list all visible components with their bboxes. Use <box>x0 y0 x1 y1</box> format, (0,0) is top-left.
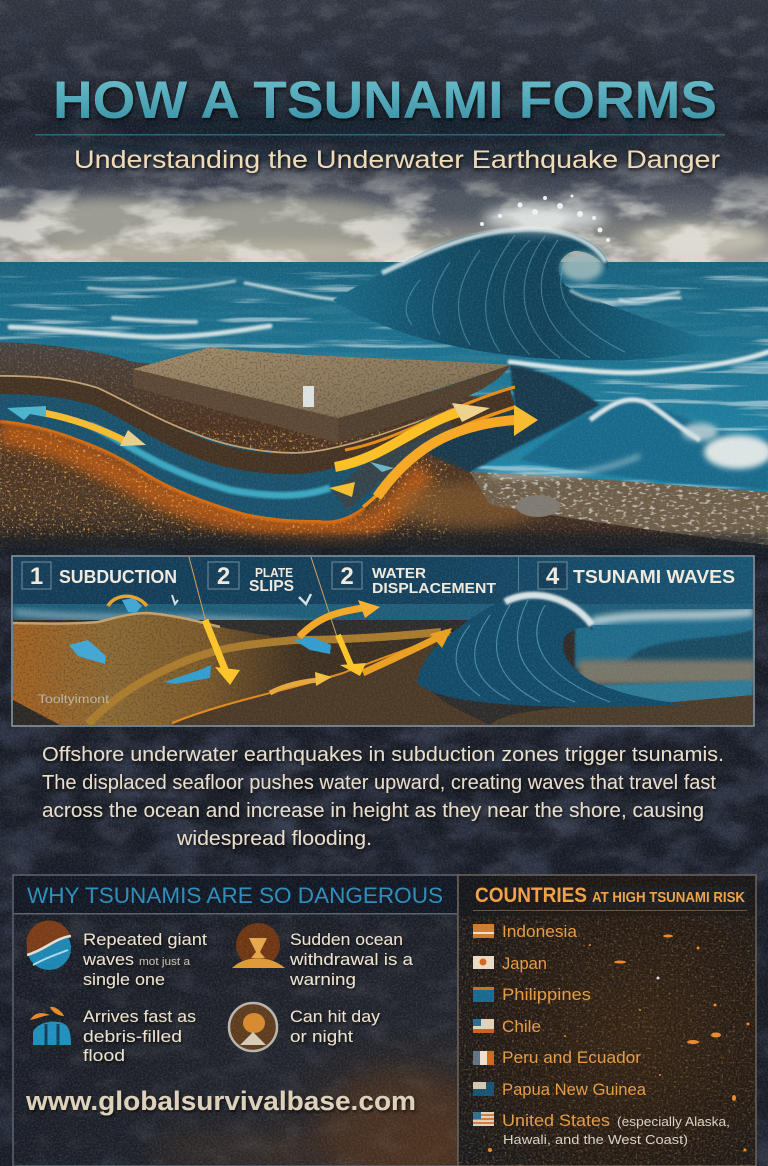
item: ocean withdrawal <box>289 930 414 989</box>
step 4: tsunami waves <box>538 562 735 590</box>
main breaking wave <box>333 194 720 360</box>
item: debris flood: Arrives fast as <box>83 1007 196 1026</box>
country: United States: United States <box>502 1111 610 1130</box>
country: Philippines <box>473 985 591 1004</box>
embers <box>488 934 750 1152</box>
item: repeated waves: single one <box>83 970 165 989</box>
rock on the beach <box>516 495 560 517</box>
step 2: plate slips: SLIPS <box>249 578 294 595</box>
item: repeated waves <box>82 930 207 989</box>
main title: HOW A TSUNAMI FORMS <box>53 71 717 130</box>
item: ocean withdrawal: withdrawal is a <box>289 950 414 969</box>
item: debris flood: flood <box>83 1046 125 1065</box>
item: debris flood <box>83 1007 196 1065</box>
title divider line <box>35 134 725 136</box>
explanatory paragraph: widespread flooding. <box>176 828 372 850</box>
panel: countries at high tsunami risk <box>458 875 756 1166</box>
item: debris flood: debris-filled <box>83 1027 182 1046</box>
country: Philippines: Philippines <box>502 985 591 1004</box>
explanatory paragraph: across the ocean and increase in height as they near the shore, causing <box>42 800 704 822</box>
ocean surface <box>0 262 768 548</box>
step 1: subduction: 1 <box>30 563 43 590</box>
item: day or night: or night <box>290 1027 353 1046</box>
step 3: water displacement: WATER <box>372 565 426 582</box>
lower right breaker wave <box>490 396 768 490</box>
country: United States <box>473 1111 730 1147</box>
process illustration <box>13 557 756 725</box>
item: repeated waves: Repeated giant <box>83 930 207 949</box>
country: United States: Hawali, and the West Coast) <box>503 1132 688 1147</box>
panel heading: WHY TSUNAMIS ARE SO DANGEROUS <box>27 883 443 908</box>
spray droplets <box>480 194 610 242</box>
panel heading: AT HIGH TSUNAMI RISK <box>592 890 745 906</box>
step 2: plate slips: PLATE <box>255 565 293 580</box>
explanatory paragraph: Offshore underwater earthquakes in subduction zones trigger tsunamis. <box>42 744 724 766</box>
country: United States: (especially Alaska, <box>617 1114 730 1129</box>
small wave <box>417 593 690 707</box>
orange downward arrow: plate slip <box>189 557 240 685</box>
orange rising arrows <box>270 600 452 693</box>
step 4: tsunami waves: TSUNAMI WAVES <box>573 567 735 587</box>
country: Chile <box>473 1017 541 1036</box>
panel heading <box>14 876 457 914</box>
country: Papua New Guinea: Papua New Guinea <box>502 1080 647 1099</box>
blue water arrows and bird icons <box>69 594 331 684</box>
step 3: water displacement <box>332 562 496 597</box>
panel: why tsunamis are so dangerous <box>13 875 480 1166</box>
explanatory paragraph: The displaced seafloor pushes water upward, creating waves that travel fast <box>42 772 716 794</box>
icon: debris flood <box>30 1007 71 1045</box>
step 4: tsunami waves: 4 <box>546 563 560 590</box>
step 3: water displacement: DISPLACEMENT <box>372 580 496 597</box>
item: repeated waves: mot just a <box>139 956 191 968</box>
icon: wave circle <box>26 920 71 970</box>
tectonic plate slab <box>130 345 515 443</box>
dark wave shoulder beside slab <box>420 365 600 472</box>
subtitle: Understanding the Underwater Earthquake Danger <box>74 146 720 174</box>
country: Indonesia: Indonesia <box>502 922 578 941</box>
small caption: Tooltyimont <box>38 694 110 706</box>
country: Peru and Ecuador: Peru and Ecuador <box>502 1048 641 1067</box>
panel heading <box>473 884 747 911</box>
panel: four-step process strip <box>12 556 756 726</box>
item: repeated waves: waves <box>82 950 134 969</box>
explanatory paragraph <box>42 744 724 850</box>
hero illustration: stormy sky, ocean, wave and seafloor <box>0 0 768 556</box>
step 1: subduction: SUBDUCTION <box>59 567 177 587</box>
orange downward arrow: water displacement <box>311 557 366 676</box>
website url: www.globalsurvivalbase.com <box>25 1086 416 1116</box>
item: ocean withdrawal: Sudden ocean <box>290 930 403 949</box>
yellow motion arrows on the plate <box>7 403 538 497</box>
icon: ocean withdrawal <box>232 923 285 968</box>
step 3: water displacement: 2 <box>340 563 354 590</box>
strata bands with glowing fault <box>0 375 515 521</box>
panel heading: COUNTRIES <box>475 884 587 907</box>
icon: day or night clock <box>229 1003 277 1051</box>
item: day or night <box>290 1007 381 1046</box>
distant sea and town <box>575 618 755 668</box>
step 2: plate slips: 2 <box>217 563 230 590</box>
item: day or night: Can hit day <box>290 1007 381 1026</box>
item: ocean withdrawal: warning <box>289 970 356 989</box>
sky and clouds <box>0 0 768 264</box>
seafloor and shore <box>0 340 768 556</box>
step 1: subduction <box>22 562 177 590</box>
country: Japan <box>473 954 547 973</box>
country: Japan: Japan <box>502 954 547 973</box>
country: Chile: Chile <box>502 1017 541 1036</box>
step 2: plate slips <box>208 562 294 595</box>
